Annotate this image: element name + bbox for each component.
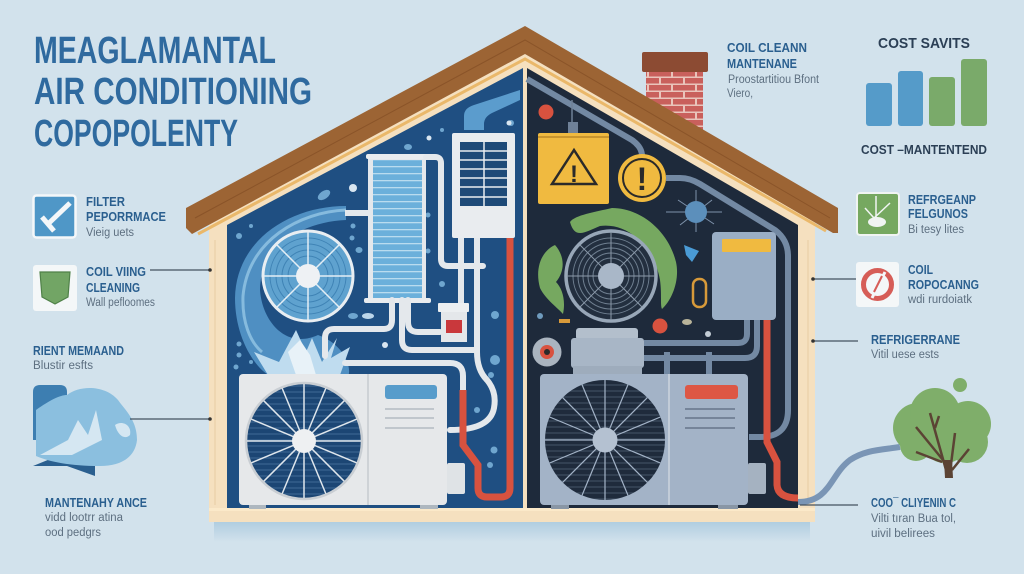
title xyxy=(34,30,312,155)
dial gauge xyxy=(532,338,562,366)
callout: refrigerant fellows xyxy=(857,192,976,236)
callout: coil replacing: COIL xyxy=(908,262,933,277)
warning sign box xyxy=(538,100,609,204)
icon: filter check xyxy=(34,196,76,238)
callout: filter performance: PEPORRMACE xyxy=(86,209,166,224)
icon: green coil xyxy=(33,265,77,311)
red refrigerant pipe xyxy=(767,320,798,498)
callout: refrigerant fellows: REFRGEANP xyxy=(908,192,976,207)
callout: rient demand xyxy=(33,343,124,372)
callout: cool climate: COO¯ CLIYENIN C xyxy=(871,495,956,510)
white pipes xyxy=(325,157,495,430)
callout: coil cleaning: CLEANING xyxy=(86,280,140,295)
grey duct pipes xyxy=(527,79,788,437)
callout: coil clean maintenance xyxy=(727,40,820,100)
icon: blue cloud wave xyxy=(33,385,212,476)
panel: neglected right side xyxy=(527,68,798,509)
callout: coil replacing: ROPOCANNG xyxy=(908,277,979,292)
icon: air filter coil xyxy=(345,154,436,303)
callout: coil replacing: wdi rurdoiatk xyxy=(907,294,972,306)
outdoor unit right xyxy=(540,374,766,509)
callout: refrigerant fellows: Bi tesy lites xyxy=(908,224,964,236)
outdoor unit left xyxy=(239,374,465,509)
callout: cool climate xyxy=(800,495,956,540)
title: AIR CONDITIONING xyxy=(34,71,312,113)
title: MEAGLAMANTAL xyxy=(34,30,276,72)
callout: cool climate: Vilti tıran Bua tol, xyxy=(871,513,956,525)
callout: refrigerant xyxy=(811,332,960,361)
compressor xyxy=(571,328,644,374)
callout: coil clean maintenance: COIL CLEANN xyxy=(727,40,807,55)
wall thermostat panel xyxy=(452,90,520,238)
control box xyxy=(438,303,469,342)
sparkles and droplets xyxy=(234,120,514,468)
house ground shadow xyxy=(214,522,810,542)
callout: filter performance: Vieig uets xyxy=(86,227,134,239)
virus contaminant xyxy=(666,190,722,232)
warning sign box: ! xyxy=(570,161,578,188)
red refrigerant pipe xyxy=(463,238,510,497)
callout: coil cleaning: Wall pefloomes xyxy=(86,297,155,309)
callout: coil replacing xyxy=(811,262,979,307)
callout: refrigerant fellows: FELGUNOS xyxy=(908,206,968,221)
callout: maintenance: MANTENAHY ANCE xyxy=(45,495,147,510)
callout: cool climate: uivil belirees xyxy=(871,528,935,540)
red debris gear xyxy=(538,104,554,120)
icon: red prohibition ring xyxy=(856,262,899,307)
callout: maintenance: ood pedgrs xyxy=(45,527,101,539)
icon: right fan xyxy=(566,231,656,321)
air swirl and splash xyxy=(235,206,350,376)
green mould leaves xyxy=(538,208,677,314)
callout: coil cleaning: COIL VIING xyxy=(86,264,146,279)
house frame xyxy=(209,54,815,522)
title: COPOPOLENTY xyxy=(34,113,238,155)
callout: filter performance xyxy=(34,194,166,239)
icon: blue arrow shape xyxy=(684,245,699,262)
warning circle: ! xyxy=(637,161,647,197)
icon: green leaf xyxy=(857,193,899,235)
icon: tree xyxy=(893,378,991,478)
icon: left fan xyxy=(263,231,353,321)
roof xyxy=(186,26,838,234)
callout: coil clean maintenance: Proostartitiou Bfont xyxy=(728,74,820,86)
chimney xyxy=(642,52,708,140)
callout: filter performance: FILTER xyxy=(86,194,126,209)
callout: maintenance: vidd lootrr atina xyxy=(45,512,124,524)
bar chart: cost savings: COST SAVITS xyxy=(878,35,970,52)
callout: maintenance xyxy=(45,495,147,539)
callout: rient demand: RIENT MEMAAND xyxy=(33,343,124,358)
small debris xyxy=(537,313,711,337)
callout: refrigerant: Vitil uese ests xyxy=(871,349,939,361)
panel: clean left side xyxy=(227,68,523,509)
callout: rient demand: Blustir esfts xyxy=(33,360,93,372)
bar chart: cost savings xyxy=(861,35,987,157)
right grey unit box xyxy=(712,232,776,320)
callout: coil clean maintenance: Viero, xyxy=(727,88,753,100)
callout: coil cleaning xyxy=(33,264,212,311)
bar chart: cost savings: COST –MANTENTEND xyxy=(861,142,987,157)
icon: orange ring xyxy=(693,279,706,307)
callout: coil clean maintenance: MANTENANE xyxy=(727,56,797,71)
warning circle xyxy=(618,154,666,202)
connector pipe to tree xyxy=(798,447,900,502)
callout: refrigerant: REFRIGERRANE xyxy=(871,332,960,347)
